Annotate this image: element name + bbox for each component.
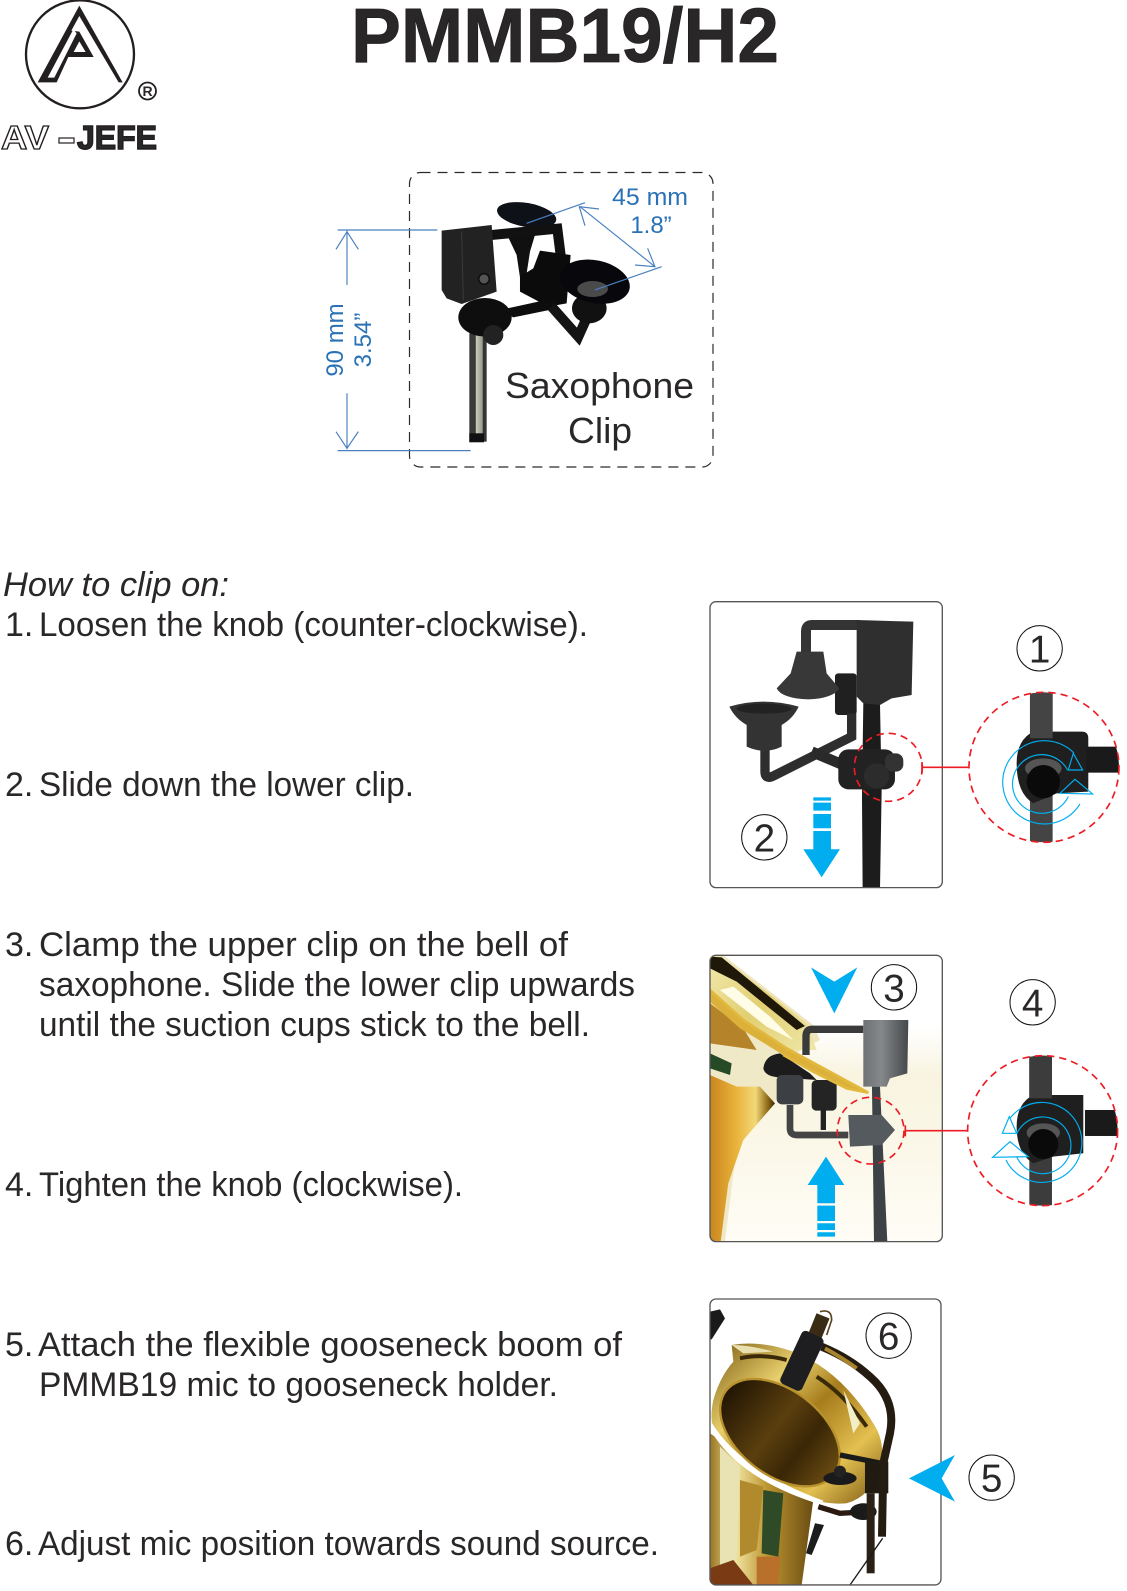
step 6: 6. bbox=[5, 1525, 33, 1563]
logo wordmark: JEFE bbox=[77, 119, 157, 156]
saxophone clip product photo bbox=[442, 198, 634, 442]
step 2: 2. bbox=[5, 766, 33, 804]
panel frame bbox=[710, 1299, 941, 1585]
panel frame bbox=[710, 955, 942, 1242]
text block: instructions bbox=[3, 566, 659, 1563]
step number 4: 4 bbox=[1022, 982, 1043, 1025]
panel frame bbox=[710, 602, 942, 888]
step number 6: 6 bbox=[878, 1316, 899, 1359]
step number 1 bbox=[1017, 626, 1062, 671]
step number 6 bbox=[866, 1313, 911, 1359]
step 5: 5. bbox=[5, 1326, 33, 1364]
step number 5 bbox=[969, 1455, 1014, 1501]
arrow: slide down bbox=[803, 797, 840, 877]
label: 90 mm 3.54 in: 3.54” bbox=[350, 313, 377, 367]
panel: saxophone clip with dimensions bbox=[322, 172, 713, 467]
photo: clip on saxophone bell bbox=[710, 955, 942, 1242]
step number 2: 2 bbox=[754, 817, 775, 860]
step 4: Tighten the knob (clockwise). bbox=[39, 1166, 463, 1204]
label: Saxophone Clip: Clip bbox=[568, 410, 632, 451]
step number 5: 5 bbox=[981, 1458, 1002, 1501]
arrow: pointing to gooseneck holder bbox=[909, 1455, 955, 1502]
step 3 bbox=[5, 926, 635, 1044]
label: 90 mm 3.54 in bbox=[322, 303, 377, 377]
step 3: Clamp the upper clip on the bell of bbox=[39, 926, 569, 964]
logo wordmark: AV bbox=[1, 119, 49, 156]
photo: microphone on saxophone bbox=[710, 1309, 896, 1584]
logo: AV-JEFE bbox=[1, 0, 157, 156]
label: 45 mm 1.8 in: 1.8” bbox=[630, 212, 672, 239]
panel: steps 3 and 4 bbox=[710, 955, 968, 1242]
step number 1: 1 bbox=[1029, 628, 1050, 671]
panel: steps 5 and 6 bbox=[700, 1299, 1014, 1585]
red dashed magnifier bbox=[968, 1056, 1118, 1206]
width dimension lines bbox=[527, 203, 662, 290]
label: 45 mm 1.8 in bbox=[612, 184, 688, 239]
registered mark bbox=[139, 82, 156, 100]
label: Saxophone Clip: Saxophone bbox=[505, 365, 694, 406]
red connector line bbox=[905, 1125, 968, 1136]
instructions heading: How to clip on: bbox=[3, 566, 229, 604]
step 3: 3. bbox=[5, 926, 33, 964]
panel: steps 1 and 2 bbox=[710, 602, 968, 890]
step 2: Slide down the lower clip. bbox=[39, 766, 414, 804]
counter-clockwise arrows bbox=[1003, 741, 1093, 824]
step 5: Attach the flexible gooseneck boom of bbox=[38, 1326, 623, 1364]
red dashed highlight bbox=[854, 733, 922, 801]
step 6: Adjust mic position towards sound source. bbox=[38, 1525, 659, 1563]
step number 3 bbox=[871, 965, 917, 1010]
arrow: slide up bbox=[808, 1157, 844, 1237]
label: 90 mm 3.54 in: 90 mm bbox=[322, 303, 349, 377]
red dashed magnifier bbox=[969, 692, 1119, 842]
magnified knob photo bbox=[1017, 1053, 1118, 1208]
logo wordmark bbox=[1, 119, 157, 156]
step number 4 bbox=[1010, 980, 1055, 1025]
photo: clip on stand bbox=[729, 620, 914, 887]
label: Saxophone Clip bbox=[505, 365, 694, 451]
red dashed highlight bbox=[837, 1097, 904, 1164]
step 4: 4. bbox=[5, 1166, 33, 1204]
magnified knob photo bbox=[1017, 690, 1120, 845]
step number 2 bbox=[742, 815, 787, 860]
step 3: saxophone. Slide the lower clip upwards bbox=[39, 966, 635, 1004]
height dimension lines bbox=[336, 230, 471, 451]
dashed frame bbox=[410, 172, 713, 467]
clockwise arrows bbox=[993, 1102, 1082, 1182]
step 3: until the suction cups stick to the bell. bbox=[39, 1006, 590, 1044]
step number 3: 3 bbox=[883, 967, 905, 1010]
icon: logo circle with A bbox=[26, 0, 134, 108]
step 1: Loosen the knob (counter-clockwise). bbox=[39, 606, 588, 644]
detail: knob tighten bbox=[968, 980, 1118, 1208]
step 5: PMMB19 mic to gooseneck holder. bbox=[39, 1366, 558, 1404]
registered mark: R bbox=[142, 83, 153, 99]
red connector line bbox=[922, 762, 968, 773]
arrow: clamp down bbox=[811, 967, 857, 1013]
detail: knob loosen bbox=[969, 626, 1120, 845]
step 5 bbox=[5, 1326, 623, 1404]
label: 45 mm 1.8 in: 45 mm bbox=[612, 184, 688, 211]
step 1: 1. bbox=[5, 606, 33, 644]
